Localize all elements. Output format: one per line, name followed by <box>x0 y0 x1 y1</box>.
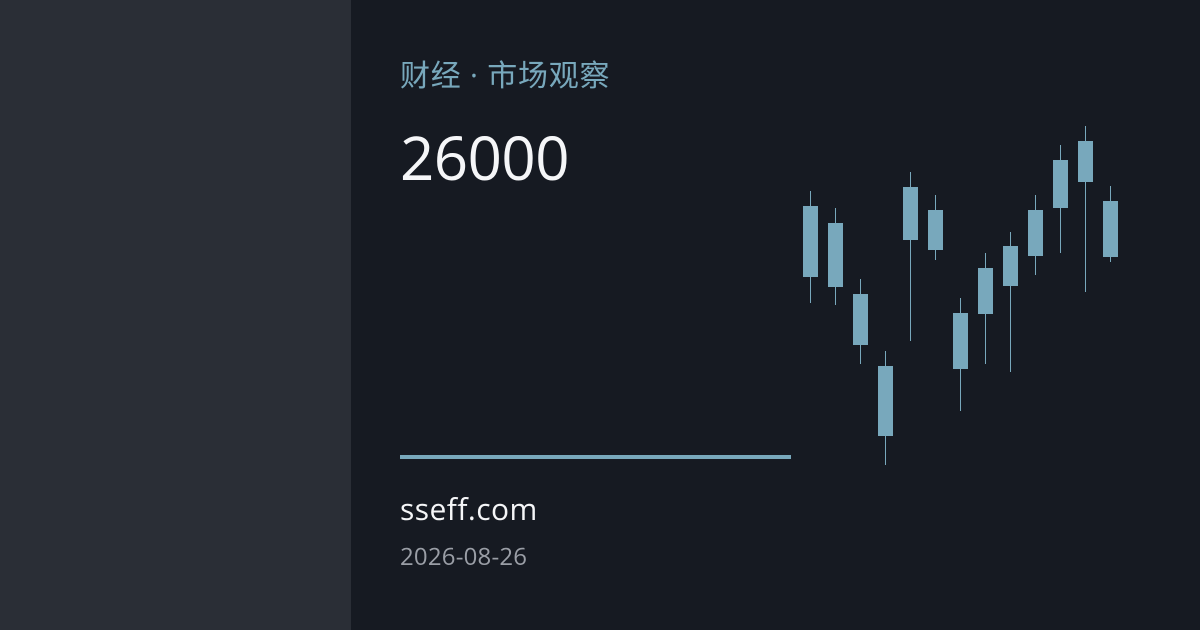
eyebrow heading: 财经 · 市场观察 <box>400 54 610 95</box>
date: 2026-08-26 <box>400 540 527 573</box>
panel: left sidebar <box>0 0 351 630</box>
site name: sseff.com <box>400 488 538 529</box>
main number: 26000 <box>400 116 569 198</box>
accent rule <box>400 455 791 459</box>
